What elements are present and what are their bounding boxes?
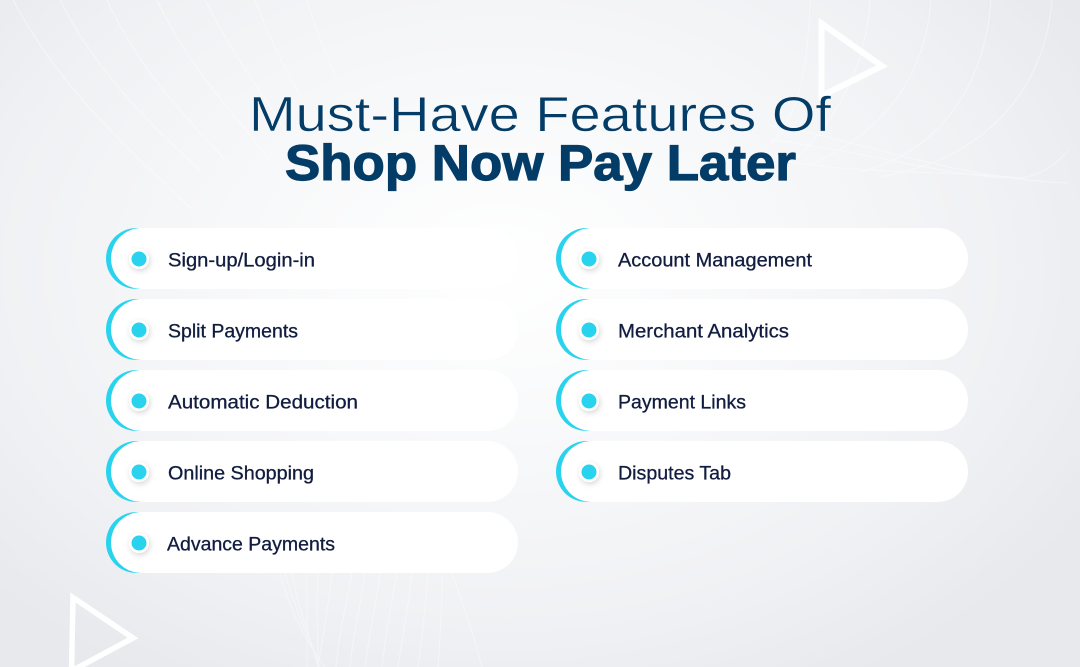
title line 1: Must-Have Features Of: [249, 88, 831, 142]
item: Account Management: Account Management: [618, 250, 813, 272]
item: Disputes Tab: [556, 441, 968, 502]
title: [249, 88, 831, 191]
triangle: bottom left: [72, 598, 133, 667]
item: Disputes Tab: Disputes Tab: [618, 462, 731, 484]
triangle: top right: [822, 24, 882, 96]
item: Split Payments: Split Payments: [168, 320, 298, 342]
item: Payment Links: [556, 370, 968, 431]
item: Online Shopping: [106, 441, 518, 502]
item: Sign-up/Login-in: [106, 228, 518, 289]
item: Automatic Deduction: Automatic Deduction: [168, 392, 358, 414]
item: Split Payments: [106, 299, 518, 360]
panel: right feature list: [556, 228, 968, 502]
item: Account Management: [556, 228, 968, 289]
panel: left feature list: [106, 228, 518, 573]
item: Advance Payments: Advance Payments: [167, 534, 335, 556]
title line 2: Shop Now Pay Later: [285, 135, 796, 191]
item: Sign-up/Login-in: Sign-up/Login-in: [168, 250, 315, 272]
item: Online Shopping: Online Shopping: [168, 462, 314, 484]
item: Merchant Analytics: Merchant Analytics: [618, 320, 789, 342]
item: Merchant Analytics: [556, 299, 968, 360]
item: Payment Links: Payment Links: [618, 392, 746, 414]
item: Advance Payments: [106, 512, 518, 573]
item: Automatic Deduction: [106, 370, 518, 431]
